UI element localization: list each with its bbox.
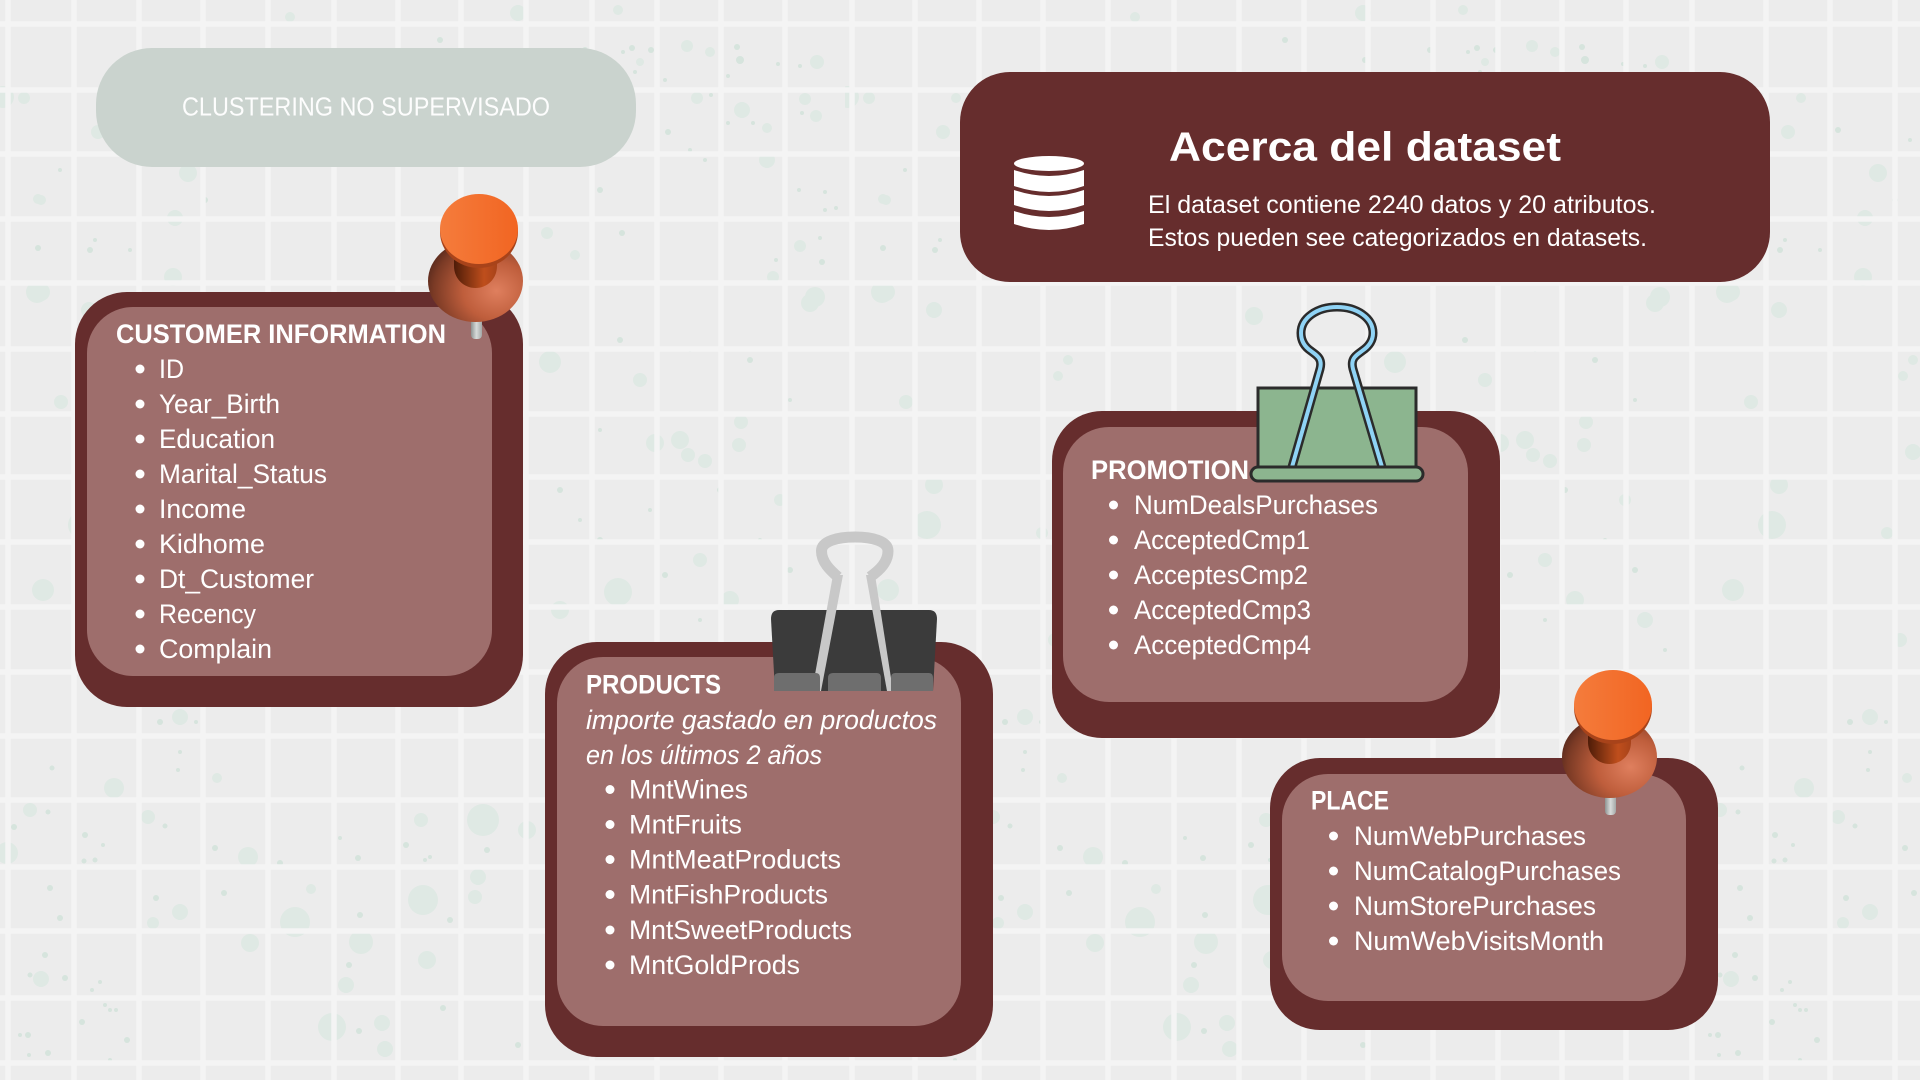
text: products description: importe gastado en productos [586,705,937,735]
list: promotion attributes: AcceptedCmp1 [1134,525,1310,555]
list: promotion attributes: AcceptesCmp2 [1134,560,1308,590]
list: product attributes: MntMeatProducts [629,844,841,874]
panel: products [545,642,993,1057]
list: customer attributes: Year_Birth [159,389,280,419]
list: customer attributes: Education [159,424,275,454]
panel: place [1270,758,1718,1030]
list: place attributes: NumStorePurchases [1354,891,1596,921]
text: products description: en los últimos 2 años [586,740,822,770]
list: customer attributes: Dt_Customer [159,564,314,594]
icon: black binder clip [771,537,937,691]
list: product attributes: MntSweetProducts [629,915,852,945]
list: place attributes: NumWebVisitsMonth [1354,926,1604,956]
list: customer attributes: Income [159,494,246,524]
panel: promotion [1052,411,1500,738]
list: product attributes: MntGoldProds [629,950,800,980]
list: product attributes: MntFishProducts [629,880,828,910]
icon: orange push pin (place) [1562,670,1657,815]
list: customer attributes: Marital_Status [159,459,327,489]
list: promotion attributes [1109,490,1378,660]
icon: database [1014,156,1084,230]
list: promotion attributes: AcceptedCmp3 [1134,595,1311,625]
list: place attributes [1329,821,1621,956]
list: promotion attributes: NumDealsPurchases [1134,490,1378,520]
text: dataset description: El dataset contiene 2240 datos y 20 atributos. [1148,191,1656,219]
heading: acerca del dataset: Acerca del dataset [1169,124,1561,170]
list: product attributes [606,774,852,980]
list: customer attributes [136,354,327,664]
heading: promotion: PROMOTION [1091,455,1249,485]
list: customer attributes: Complain [159,634,272,664]
icon: orange push pin (customer) [428,194,523,339]
heading: customer information: CUSTOMER INFORMATION [116,319,446,349]
list: customer attributes: Kidhome [159,529,265,559]
text: dataset description: Estos pueden see categorizados en datasets. [1148,224,1647,252]
banner: clustering no supervisado [96,48,636,167]
panel: customer information [75,292,523,707]
list: customer attributes: ID [159,354,184,384]
banner: clustering no supervisado: CLUSTERING NO SUPERVISADO [182,92,550,122]
list: place attributes: NumWebPurchases [1354,821,1586,851]
panel: acerca del dataset [960,72,1770,282]
text: dataset description [1148,191,1656,252]
list: place attributes: NumCatalogPurchases [1354,856,1621,886]
heading: products: PRODUCTS [586,670,721,700]
list: product attributes: MntFruits [629,810,742,840]
heading: place: PLACE [1311,786,1389,816]
text: products description [586,705,937,770]
list: customer attributes: Recency [159,599,256,629]
icon: green binder clip [1251,307,1423,481]
list: product attributes: MntWines [629,774,748,804]
list: promotion attributes: AcceptedCmp4 [1134,630,1311,660]
